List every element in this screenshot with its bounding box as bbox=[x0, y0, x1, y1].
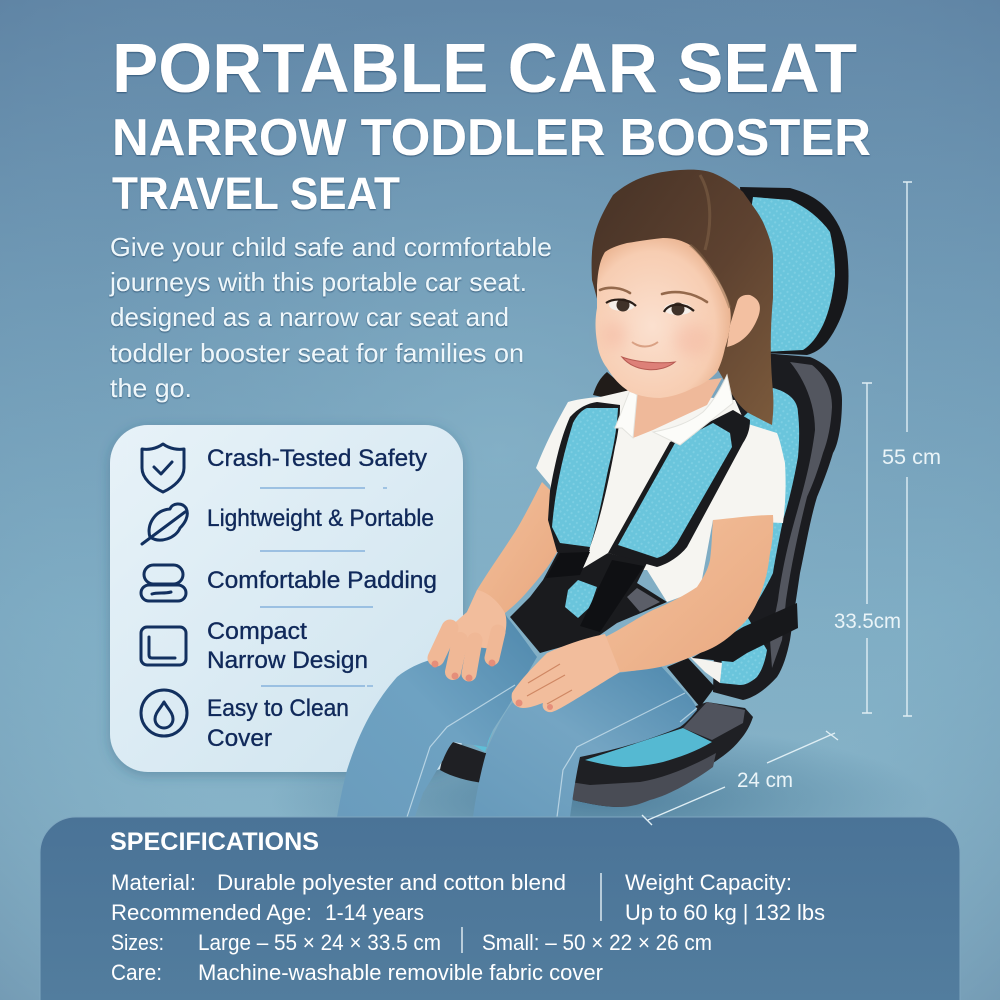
right hand bbox=[512, 634, 620, 712]
seat headrest bbox=[740, 187, 848, 355]
intro paragraph: journeys with this portable car seat. bbox=[109, 267, 527, 297]
spec rows: Machine-washable removible fabric cover bbox=[198, 960, 603, 985]
seat backrest bbox=[713, 353, 842, 700]
right leg jeans bbox=[473, 665, 697, 817]
neck bbox=[633, 378, 722, 438]
spec rows: Care: bbox=[111, 960, 162, 985]
right arm bbox=[605, 515, 773, 672]
spec rows: Material: bbox=[111, 870, 196, 895]
torso harness and buckle bbox=[510, 550, 667, 653]
spec rows: Durable polyester and cotton blend bbox=[217, 870, 566, 895]
intro paragraph bbox=[109, 232, 552, 403]
feature: compact: Narrow Design bbox=[207, 647, 368, 674]
jeans seams bbox=[407, 685, 697, 817]
icon: feather bbox=[142, 504, 187, 544]
spec rows: Sizes: bbox=[111, 930, 164, 955]
feature: easy clean bbox=[207, 695, 349, 752]
feature: lightweight: Lightweight & Portable bbox=[207, 505, 434, 532]
dimension: 55 cm: 55 cm bbox=[882, 446, 941, 469]
left leg jeans bbox=[337, 613, 537, 817]
spec rows: Small: – 50 × 22 × 26 cm bbox=[482, 930, 712, 955]
hair strands bbox=[690, 175, 730, 308]
dimension: 33.5 cm: 33.5cm bbox=[834, 610, 901, 633]
dimension: 55 cm bbox=[882, 182, 941, 716]
feature: padding: Comfortable Padding bbox=[207, 567, 437, 594]
left arm bbox=[467, 482, 557, 613]
seat base bbox=[440, 702, 753, 807]
eyes bbox=[600, 288, 707, 316]
title: TRAVEL SEAT bbox=[112, 168, 400, 219]
spec rows: Weight Capacity: bbox=[625, 870, 792, 895]
panel: features bbox=[110, 425, 463, 772]
feature: easy clean: Cover bbox=[207, 725, 272, 752]
dimension: 24 cm bbox=[642, 731, 838, 825]
dimension: 33.5 cm bbox=[834, 383, 901, 713]
title bbox=[112, 29, 871, 219]
face bbox=[596, 175, 760, 398]
left hand bbox=[432, 590, 506, 682]
icon: narrow bbox=[141, 627, 186, 665]
cheeks bbox=[602, 321, 710, 356]
spec rows bbox=[111, 870, 825, 985]
icon: padding bbox=[141, 565, 186, 601]
title: PORTABLE CAR SEAT bbox=[112, 29, 857, 107]
nose and mouth bbox=[622, 342, 675, 370]
spec rows: 1-14 years bbox=[325, 900, 424, 925]
spec rows: Large – 55 × 24 × 33.5 cm bbox=[198, 930, 441, 955]
intro paragraph: Give your child safe and cormfortable bbox=[110, 232, 552, 262]
icon: water drop bbox=[141, 690, 187, 736]
collar bbox=[615, 375, 733, 445]
intro paragraph: toddler booster seat for families on bbox=[110, 338, 524, 368]
icon: shield bbox=[142, 444, 184, 492]
intro paragraph: the go. bbox=[110, 373, 192, 403]
ear bbox=[727, 295, 760, 347]
panel: specifications bbox=[40, 817, 960, 1000]
harness shoulder pads bbox=[545, 402, 750, 567]
feature: easy clean: Easy to Clean bbox=[207, 695, 349, 722]
feature: compact: Compact bbox=[207, 618, 307, 645]
illustration: child in car seat bbox=[337, 170, 848, 817]
hair back and ponytail bbox=[592, 170, 773, 425]
hair behind left shoulder bbox=[593, 372, 630, 405]
feature: crash-tested: Crash-Tested Safety bbox=[207, 445, 427, 472]
dimension: 24 cm: 24 cm bbox=[737, 769, 793, 792]
feature: compact bbox=[207, 618, 368, 674]
specifications heading: SPECIFICATIONS bbox=[110, 828, 319, 856]
intro paragraph: designed as a narrow car seat and bbox=[110, 302, 509, 332]
spec rows: Recommended Age: bbox=[111, 900, 312, 925]
spec rows: Up to 60 kg | 132 lbs bbox=[625, 900, 825, 925]
shirt bbox=[536, 390, 786, 683]
side belt bbox=[667, 603, 798, 707]
title: NARROW TODDLER BOOSTER bbox=[112, 109, 871, 167]
